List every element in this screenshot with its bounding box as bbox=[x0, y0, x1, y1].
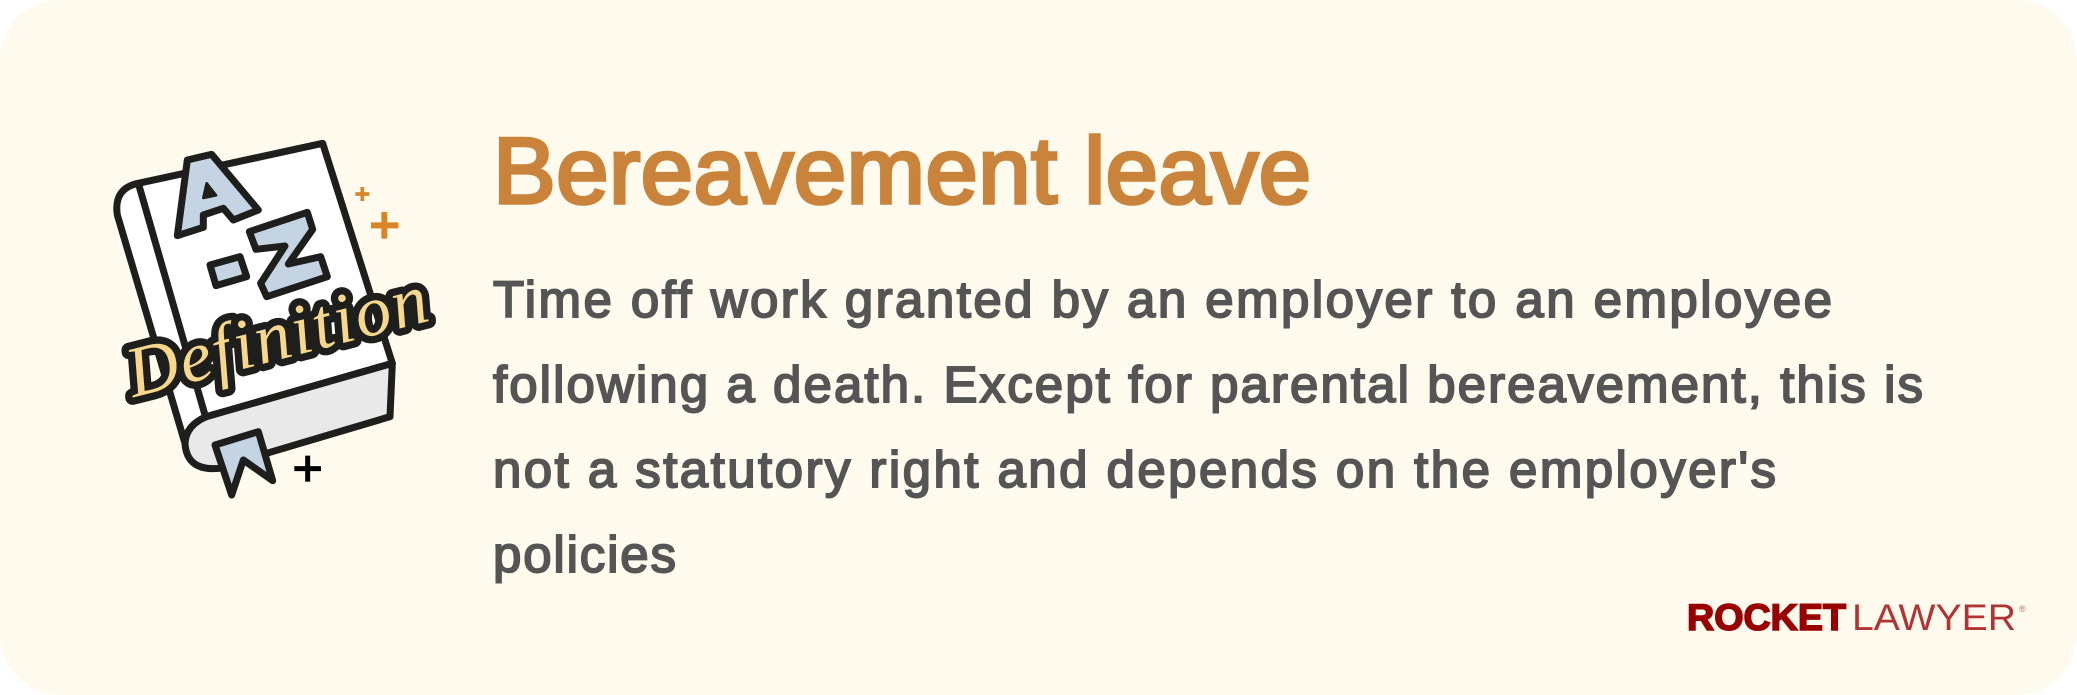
icon: dash bbox=[210, 257, 247, 286]
icon: black plus bbox=[294, 456, 321, 482]
logo wordmark light: LAWYER bbox=[1852, 597, 2016, 638]
icon: letter A counter bbox=[203, 183, 216, 198]
icon: small orange plus bbox=[355, 187, 369, 201]
icon: letter Z bbox=[249, 212, 327, 297]
icon: book pages bbox=[185, 363, 392, 469]
title: Bereavement leave bbox=[493, 118, 1311, 223]
definition text block bbox=[493, 271, 1923, 583]
icon: bookmark ribbon bbox=[215, 432, 273, 495]
body line 4: policies bbox=[493, 526, 676, 583]
body line 2: following a death. Except for parental bereavement, this is bbox=[493, 356, 1923, 413]
logo: Rocket Lawyer bbox=[1687, 597, 2026, 638]
icon: letter A bbox=[177, 154, 258, 236]
icon: dictionary book with A-Z and Definition bbox=[116, 143, 436, 495]
icon: large orange plus bbox=[371, 212, 398, 239]
logo registered mark: ® bbox=[2019, 604, 2026, 614]
body line 1: Time off work granted by an employer to an employee bbox=[493, 271, 1832, 328]
icon: book cover bbox=[117, 143, 392, 443]
Definition script label: Definition bbox=[116, 258, 436, 413]
body line 3: not a statutory right and depends on the employer's bbox=[493, 441, 1776, 498]
logo wordmark heavy: ROCKET bbox=[1687, 597, 1846, 638]
icon: book spine line bbox=[138, 183, 205, 415]
